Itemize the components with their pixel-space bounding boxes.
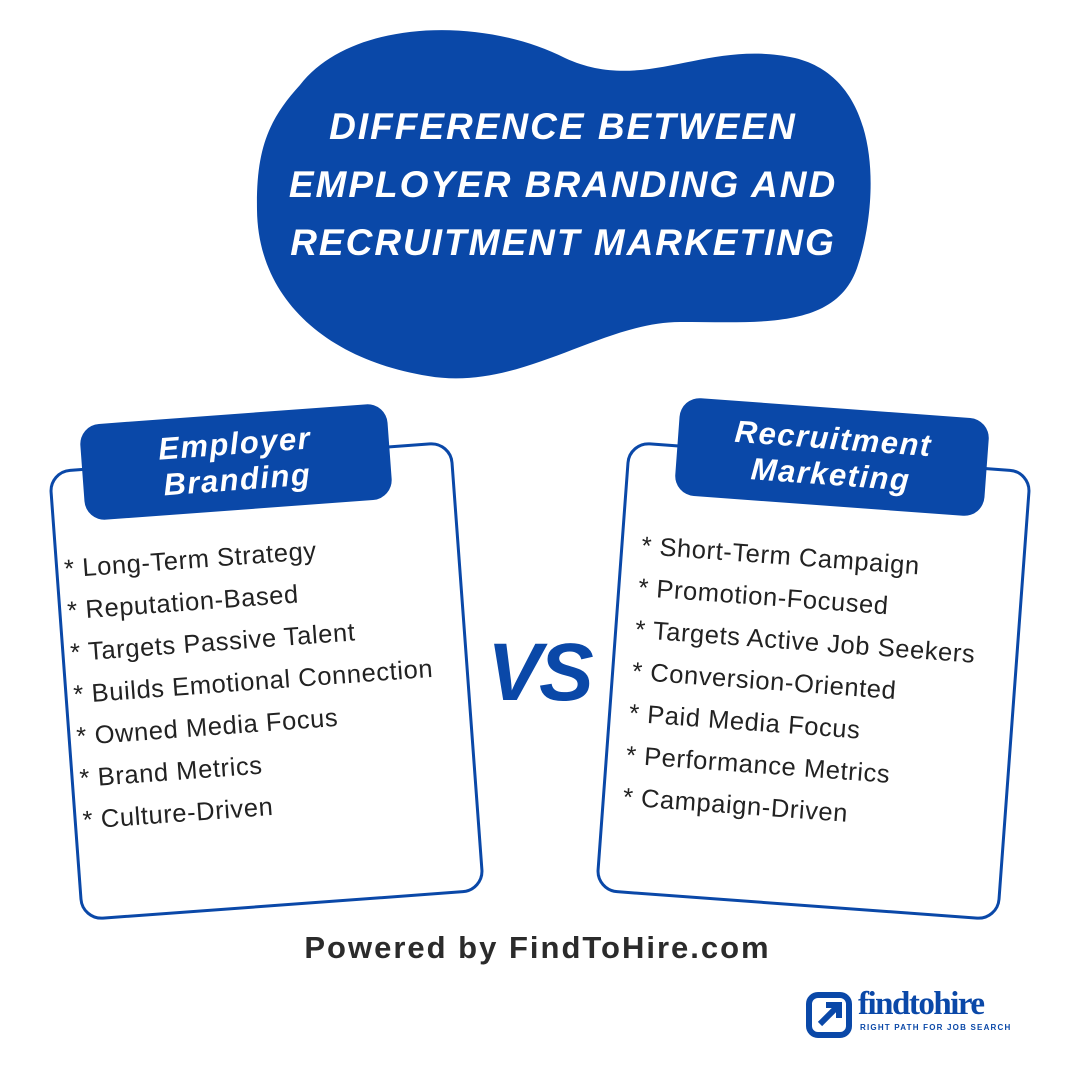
icon: arrow square (806, 992, 852, 1038)
list: employer branding items: * Targets Passive Talent (69, 618, 356, 667)
list: recruitment marketing items (622, 532, 976, 828)
list: employer branding items: * Culture-Driven (82, 793, 274, 835)
logo: findtohire: RIGHT PATH FOR JOB SEARCH (860, 1023, 1011, 1032)
list: recruitment marketing items: * Paid Media Focus (628, 700, 861, 745)
heading: recruitment marketing tab: Recruitment (734, 414, 933, 463)
heading: employer branding tab (79, 403, 393, 521)
list: employer branding items: * Brand Metrics (79, 752, 264, 793)
logo: findtohire (806, 986, 1011, 1038)
logo: findtohire: findtohire (858, 986, 984, 1022)
list: recruitment marketing items: * Promotion-Focused (637, 574, 890, 620)
list: employer branding items: * Owned Media Focus (76, 704, 339, 751)
list: employer branding items: * Reputation-Based (66, 580, 300, 625)
heading: employer branding tab: Branding (162, 457, 312, 502)
heading: recruitment marketing tab (674, 397, 990, 517)
list: recruitment marketing items: * Performance Metrics (625, 742, 891, 789)
title text: DIFFERENCE BETWEEN (329, 106, 797, 147)
list: employer branding items: * Long-Term Strategy (63, 537, 318, 583)
heading: employer branding tab: Employer (157, 420, 312, 467)
title text: RECRUITMENT MARKETING (290, 222, 836, 263)
heading: recruitment marketing tab: Marketing (750, 451, 912, 498)
list: employer branding items (63, 537, 434, 835)
panel: employer branding (48, 441, 485, 921)
title text (289, 106, 837, 263)
title text: EMPLOYER BRANDING AND (289, 164, 837, 205)
panel: recruitment marketing (595, 441, 1032, 921)
list: recruitment marketing items: * Campaign-Driven (622, 783, 849, 828)
title blob (256, 30, 871, 378)
list: recruitment marketing items: * Targets Active Job Seekers (634, 616, 976, 669)
list: recruitment marketing items: * Short-Term Campaign (640, 532, 921, 580)
footer text: Powered by FindToHire.com (304, 930, 771, 965)
VS label: VS (487, 627, 591, 718)
list: employer branding items: * Builds Emotional Connection (72, 655, 434, 709)
list: recruitment marketing items: * Conversion-Oriented (631, 658, 897, 705)
